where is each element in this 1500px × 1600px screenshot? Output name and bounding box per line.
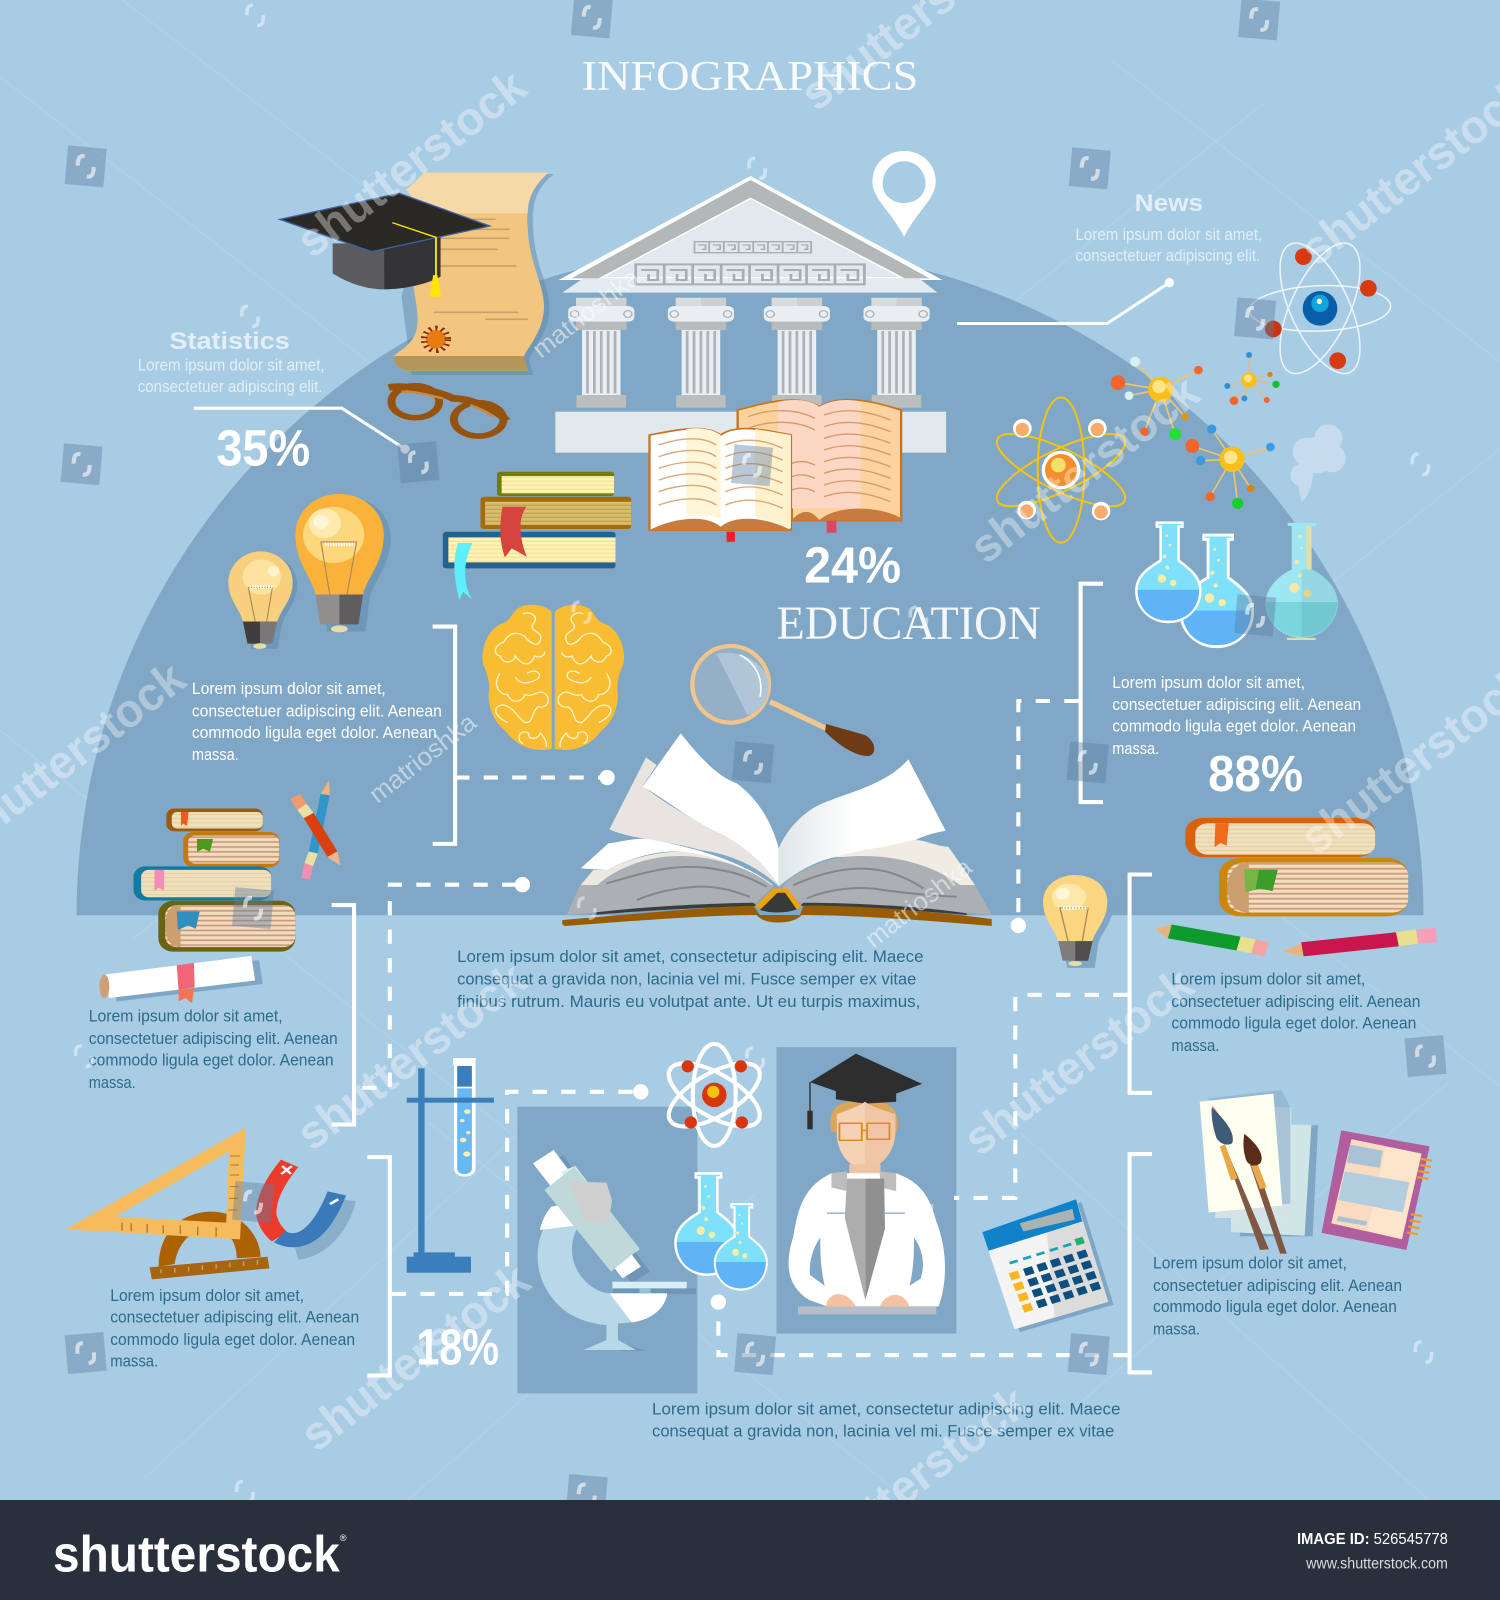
text block: paint: Lorem ipsum dolor sit amet, [1153, 1254, 1347, 1272]
text block: paint: commodo ligula eget dolor. Aenean [1153, 1298, 1397, 1316]
watermark: stock agency text: matrioshka [364, 708, 482, 809]
icon: calculator [982, 1199, 1114, 1332]
front book [649, 429, 791, 530]
text block: ruler: commodo ligula eget dolor. Aenean [110, 1331, 355, 1349]
icon: crossed pencils [295, 780, 340, 879]
icon: smoke cloud [1290, 424, 1346, 502]
text block: brain: massa. [192, 746, 239, 764]
icon: open books [649, 400, 901, 542]
icon: location pin [872, 151, 936, 237]
cyan bookmark [454, 543, 472, 600]
icon: microscope [533, 1150, 696, 1351]
icon: left book stack [133, 809, 295, 952]
icon: university building [555, 176, 946, 453]
icon: right book stack [1185, 818, 1408, 916]
text block: ruler: massa. [110, 1352, 158, 1370]
watermark: stock agency text: shutterstock [789, 1375, 1038, 1583]
bracket and dashed connector: ruler text [367, 1084, 648, 1376]
text block: ruler [110, 1287, 359, 1370]
watermark: stock agency text: matrioshka [527, 263, 646, 364]
watermark: stock agency text: shutterstock [291, 1253, 540, 1461]
text block: brain [192, 680, 442, 764]
icon: horseshoe magnet [266, 1163, 347, 1253]
text block: paint [1153, 1254, 1402, 1339]
panel: scientist [777, 1047, 956, 1334]
watermark: stock agency text: shutterstock [954, 957, 1203, 1165]
icon: flasks by microscope [676, 1173, 767, 1289]
icon: lab stand with test tube [407, 1058, 494, 1273]
connector: statistics leader [194, 408, 408, 452]
text block: left books: massa. [89, 1074, 136, 1092]
image id: IMAGE ID: 526545778 [1297, 1531, 1448, 1548]
bracket and dashed connector: left books text [332, 877, 530, 1124]
text block: paint: massa. [1153, 1321, 1200, 1339]
cover and spine [562, 906, 992, 926]
text block: statistics: Lorem ipsum dolor sit amet, [138, 356, 324, 374]
registered mark: ® [340, 1533, 347, 1543]
text block: bottom center: Lorem ipsum dolor sit amet, consectetur adipiscing elit. Maece [652, 1400, 1120, 1418]
hair [830, 1101, 898, 1132]
graduation cap [810, 1054, 922, 1104]
icon: glasses [389, 386, 506, 436]
text block: statistics: consectetuer adipiscing elit. [138, 378, 322, 396]
icon: graduation cap [280, 193, 490, 297]
icon: two light bulbs [228, 494, 391, 649]
frieze [562, 279, 937, 293]
text block: ruler: Lorem ipsum dolor sit amet, [110, 1287, 304, 1305]
bracket and dashed connector: brain text [433, 627, 615, 844]
icon: atom right [1249, 232, 1391, 385]
stat: 35%: 35% [216, 419, 310, 476]
icon: set square ruler and protractor [66, 1128, 269, 1279]
text block: flasks: commodo ligula eget dolor. Aenean [1112, 718, 1356, 736]
icon: rolled diploma [99, 956, 263, 1003]
text block: brain: consectetuer adipiscing elit. Aenean [192, 702, 442, 720]
text block: left books: consectetuer adipiscing elit. Aenean [89, 1030, 338, 1048]
icon: magnifying glass [692, 646, 874, 756]
footer logo: shutterstock [53, 1525, 340, 1582]
watermark: stock agency text: shutterstock [287, 952, 536, 1160]
text block: flasks: massa. [1112, 740, 1159, 758]
icon: stack of three books [443, 472, 631, 600]
pale flask [1266, 523, 1338, 640]
text block: left books: commodo ligula eget dolor. Aenean [89, 1051, 334, 1069]
text block: left books [89, 1007, 338, 1092]
back book [738, 400, 901, 521]
bracket and dashed connector: paint text [711, 1154, 1152, 1372]
text block: center: finibus rutrum. Mauris eu volutpat ante. Ut eu turpis maximus, [457, 993, 920, 1011]
text block: pencils [1171, 971, 1420, 1055]
text block: news [1076, 190, 1262, 265]
icon: small white atom [659, 1044, 769, 1146]
books [443, 472, 631, 568]
text block: bottom center [652, 1400, 1120, 1441]
text block: pencils: massa. [1171, 1037, 1219, 1055]
text block: pencils: consectetuer adipiscing elit. Aenean [1171, 993, 1420, 1011]
stat: 88%: 88% [1208, 745, 1303, 802]
text block: news: News [1135, 190, 1203, 217]
icon: molecules [1111, 352, 1280, 509]
dome panel [77, 247, 1423, 915]
icon: notebook [1322, 1130, 1432, 1250]
watermark: stock agency text: matrioshka [860, 853, 978, 954]
panel: microscope [517, 1107, 697, 1393]
text block: news: consectetuer adipiscing elit. [1076, 247, 1260, 265]
title: INFOGRAPHICS [582, 54, 918, 100]
text block: pencils: Lorem ipsum dolor sit amet, [1171, 971, 1365, 989]
text block: center: Lorem ipsum dolor sit amet, consectetur adipiscing elit. Maece [457, 948, 923, 966]
text block: statistics [138, 328, 324, 396]
text block: ruler: consectetuer adipiscing elit. Aenean [110, 1308, 359, 1326]
text block: flasks: consectetuer adipiscing elit. Aenean [1112, 696, 1361, 714]
footer bar [0, 1500, 1500, 1600]
text block: paint: consectetuer adipiscing elit. Aenean [1153, 1277, 1402, 1295]
icon: science flasks top right [1136, 523, 1338, 647]
connector: news leader [957, 280, 1172, 323]
roof [559, 176, 942, 280]
left pages [609, 757, 777, 885]
watermark: stock agency text: shutterstock [960, 365, 1209, 573]
columns [568, 298, 634, 408]
lab coat [789, 1173, 945, 1306]
text block: brain: Lorem ipsum dolor sit amet, [192, 680, 386, 698]
stat: 18%: 18% [416, 1318, 499, 1375]
icon: large open book [562, 733, 992, 926]
text block: center [457, 948, 923, 1011]
bracket and dashed connector: flask text [1011, 584, 1103, 933]
base platform [555, 412, 946, 453]
bracket and dashed connector: pencils text [954, 874, 1152, 1198]
text block: pencils: commodo ligula eget dolor. Aenean [1171, 1015, 1416, 1033]
icon: papers and paint brushes [1200, 1090, 1318, 1254]
icon: diploma scroll [394, 173, 554, 375]
icon: two pencils [1155, 924, 1436, 956]
website: www.shutterstock.com [1305, 1555, 1448, 1572]
stat: 24%: 24% [804, 537, 901, 594]
text block: flasks [1112, 674, 1361, 758]
text block: statistics: Statistics [169, 328, 290, 355]
text block: flasks: Lorem ipsum dolor sit amet, [1112, 674, 1305, 692]
right pages [779, 759, 946, 887]
icon: yellow atom [988, 397, 1134, 543]
text block: center: consequat a gravida non, lacinia vel mi. Fusce semper ex vitae [457, 971, 916, 989]
text block: left books: Lorem ipsum dolor sit amet, [89, 1007, 283, 1025]
icon: brain [482, 605, 624, 750]
text block: bottom center: consequat a gravida non, lacinia vel mi. Fusce semper ex vitae [652, 1423, 1114, 1441]
text block: news: Lorem ipsum dolor sit amet, [1076, 226, 1262, 244]
text block: brain: commodo ligula eget dolor. Aenean [192, 724, 437, 742]
heading: education: EDUCATION [777, 597, 1041, 650]
greek key pattern [636, 242, 864, 284]
watermark: stock agency text: shutterstock [287, 59, 536, 267]
face [837, 1102, 895, 1170]
icon: lower light bulb [1043, 875, 1114, 968]
